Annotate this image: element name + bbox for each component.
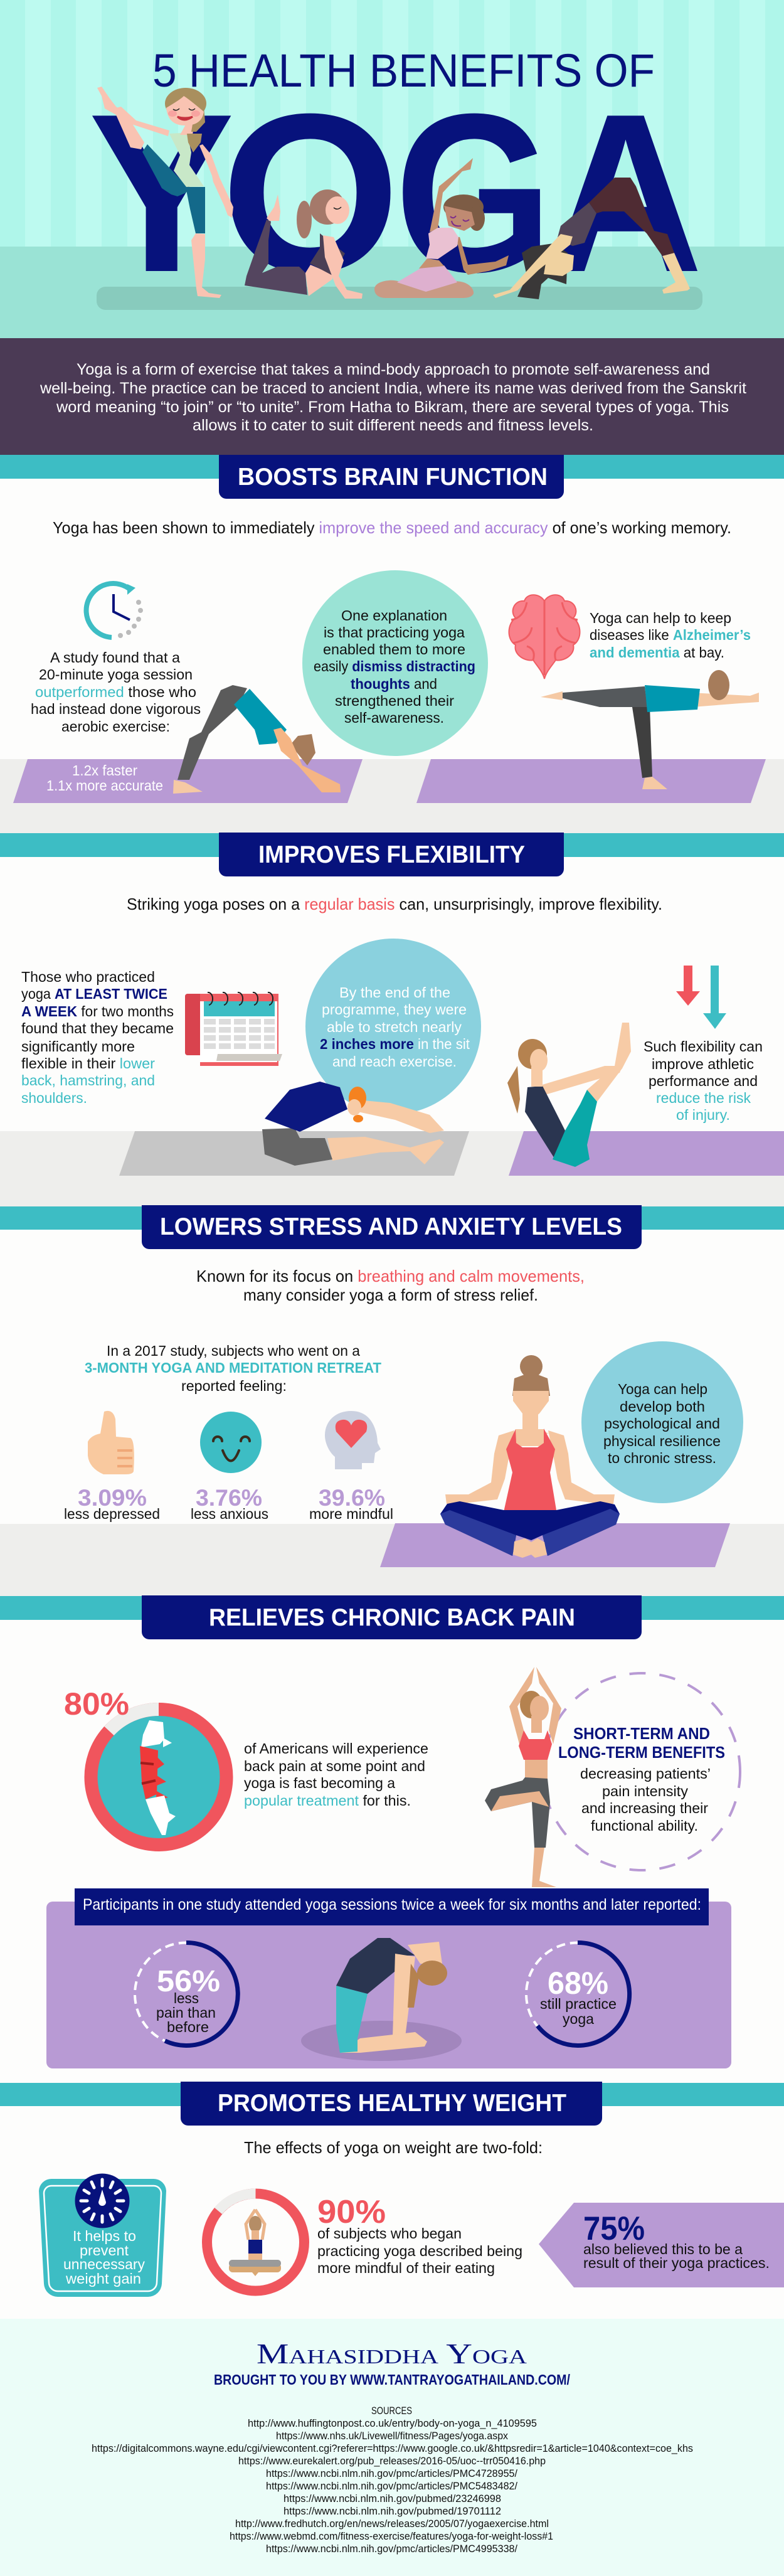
hero panel [0,0,784,339]
big word yoga: A [548,67,703,319]
sources: SOURCES [371,2405,412,2417]
circle callout: explanation: is that practicing yoga [324,624,465,641]
heading tab: PROMOTES HEALTHY WEIGHT [218,2090,566,2117]
study banner: Participants in one study attended yoga sessions twice a week for six months and later reported: [83,1896,701,1913]
circle callout: explanation: enabled them to more [323,641,465,657]
heading tab [219,833,564,876]
text: twice a week: flexible in their lower [21,1055,155,1072]
circle callout: resilience [581,1341,743,1503]
mat left [13,759,363,803]
text: back pain: popular treatment for this. [244,1792,411,1809]
text: short and long term: decreasing patients’ [580,1765,711,1782]
intro sentence: Yoga has been shown to immediately improve the speed and accuracy of one’s working memory. [53,518,731,537]
circle callout: resilience: develop both [620,1398,705,1415]
stat: depressed [64,1485,160,1522]
sources: https://www.webmd.com/fitness-exercise/features/yoga-for-weight-loss#1 [230,2530,553,2542]
circle callout: stretch [305,939,481,1114]
ring: 68 percent: 68% [548,1966,608,2001]
text: short and long term: SHORT-TERM AND [573,1724,710,1743]
text: athletic performance [644,1038,763,1123]
intro sentence [196,1267,585,1304]
circle callout: stretch: By the end of the [339,984,450,1001]
ring: 56 percent [135,1942,238,2045]
ring: 68 percent [526,1942,630,2045]
figure: small meditator [229,2210,281,2276]
stat: anxious: less anxious [191,1506,268,1522]
text: study: had instead done vigorous [31,701,201,717]
card: weight gain: unnecessary [63,2256,145,2272]
figure: bow pose [245,189,363,299]
circle callout: explanation [302,570,488,756]
circle callout: explanation: One explanation [341,607,447,624]
text: study [31,649,201,735]
circle callout: explanation: strengthened their [335,693,454,709]
section: improves flexibility [0,833,784,1206]
brand name: Mahasiddha Yoga [257,2338,527,2370]
circle callout: resilience: to chronic stress. [608,1450,716,1466]
figure: camel pose [301,1938,462,2061]
spine [140,1720,176,1835]
section: boosts brain function [0,455,784,833]
purple panel [46,1888,731,2068]
heading tab [181,2082,602,2126]
sources: http://www.fredhutch.org/en/news/releases/2005/07/yogaexercise.html [235,2518,549,2530]
callout arrow: 75 percent: also believed this to be a [583,2241,743,2257]
text: twice a week: Those who practiced [21,969,155,985]
circle callout: resilience: Yoga can help [618,1381,707,1397]
arrow: red down [676,966,700,1006]
figure: seated forward fold [262,1082,444,1166]
big word yoga [88,67,703,319]
arrow: teal down [703,966,726,1029]
stat: 90 percent [317,2194,522,2276]
intro panel [0,338,784,455]
card: weight gain: It helps to [73,2228,136,2244]
stat: mindful: 39.6% [319,1485,385,1511]
section: promotes healthy weight [0,2082,784,2297]
text: 2017 study: 3-MONTH YOGA AND MEDITATION RETREAT [85,1360,381,1376]
icon: calendar [185,993,282,1066]
text: diseases: and dementia at bay. [590,644,724,661]
circle callout: stretch: programme, they were [322,1001,467,1018]
text: athletic performance: improve athletic [652,1056,754,1072]
sources: https://www.ncbi.nlm.nih.gov/pubmed/19701112 [283,2505,501,2517]
figure: standing dancer pose [97,87,233,298]
circle callout: stretch: able to stretch nearly [327,1019,462,1035]
text: 2017 study: In a 2017 study, subjects who went on a [107,1343,360,1359]
circle callout: explanation: self-awareness. [344,710,444,726]
stat: mindful: more mindful [309,1506,393,1522]
ring: 68 percent: still practice [540,1996,617,2012]
intro panel: word meaning “to join” or “to unite”. From Hatha to Bikram, there are several types of yoga. This [56,398,729,416]
title: 5 HEALTH BENEFITS OF [152,45,655,97]
intro sentence: many consider yoga a form of stress relief. [243,1285,538,1304]
text: diseases [590,610,751,661]
section: relieves chronic back pain [0,1595,784,2068]
text: diseases: diseases like Alzheimer’s [590,627,751,643]
mat purple [509,1131,784,1176]
card: weight gain: prevent [80,2242,129,2259]
circle callout: explanation: thoughts and [351,676,437,692]
brought to you by: BROUGHT TO YOU BY WWW.TANTRAYOGATHAILAND.COM/ [214,2371,571,2388]
intro panel: Yoga is a form of exercise that takes a mind-body approach to promote self-awareness and [77,361,710,378]
dashed circle [543,1673,740,1870]
ring: 56 percent: less [174,1990,199,2006]
text: twice a week: found that they became [21,1020,174,1036]
stat: depressed: 3.09% [78,1485,147,1511]
text: 2017 study [85,1343,381,1394]
heading tab [142,1205,642,1249]
heading tab: LOWERS STRESS AND ANXIETY LEVELS [160,1213,622,1240]
text: back pain [244,1740,428,1809]
footer panel [0,2319,784,2576]
sources: https://www.eurekalert.org/pub_releases/2016-05/uoc--trr050416.php [238,2455,546,2467]
text: short and long term: LONG-TERM BENEFITS [558,1743,725,1762]
ring: 56 percent: before [167,2019,209,2035]
mat text: 1.1x more accurate [46,777,163,794]
circle callout: explanation: easily dismiss distracting [314,658,475,674]
text: short and long term: pain intensity [602,1783,689,1799]
heading tab: RELIEVES CHRONIC BACK PAIN [209,1604,575,1631]
text: athletic performance: performance and [649,1073,758,1089]
text: 2017 study: reported feeling: [181,1378,287,1394]
ring: 56 percent: 56% [157,1965,220,1998]
heading tab [142,1595,642,1639]
icon: smiley [200,1412,262,1473]
text: study: aerobic exercise: [61,718,170,735]
text: twice a week: yoga AT LEAST TWICE [21,986,167,1002]
callout arrow: 75 percent [539,2203,784,2287]
text: study: 20-minute yoga session [39,666,193,683]
text: athletic performance: of injury. [676,1107,730,1123]
text: athletic performance: Such flexibility can [644,1038,763,1055]
mat text: 1.2x faster [72,762,137,779]
stat: 90 percent: 90% [317,2194,386,2230]
stat: depressed: less depressed [64,1506,160,1522]
donut: 80 percent [91,1709,226,1844]
mat text [46,762,163,794]
text: twice a week: A WEEK for two months [21,1003,174,1019]
mat [380,1523,730,1567]
text: twice a week: shoulders. [21,1090,87,1106]
callout arrow: 75 percent: result of their yoga practices. [583,2255,770,2271]
text: short and long term: functional ability. [591,1818,698,1834]
text: athletic performance: reduce the risk [656,1090,751,1106]
mat right [416,759,766,803]
intro sentence: Striking yoga poses on a regular basis can, unsurprisingly, improve flexibility. [127,895,662,913]
stat: 80 percent: 80% [64,1686,129,1722]
sources: https://www.ncbi.nlm.nih.gov/pmc/articles/PMC5483482/ [266,2480,517,2492]
heading tab [219,455,564,499]
stat: 90 percent: more mindful of their eating [317,2260,495,2276]
circle callout: stretch: and reach exercise. [332,1053,457,1070]
sources: https://www.ncbi.nlm.nih.gov/pmc/articles/PMC4995338/ [266,2543,517,2555]
icon: scale dial [75,2173,129,2228]
study banner [75,1888,709,1925]
text: back pain: of Americans will experience [244,1740,428,1757]
text: study: A study found that a [50,649,180,666]
callout arrow: 75 percent: 75% [583,2210,645,2247]
sources [92,2405,693,2555]
intro panel: allows it to cater to suit different needs and fitness levels. [193,417,593,434]
figure: warrior three [541,670,759,789]
sources: http://www.huffingtonpost.co.uk/entry/body-on-yoga_n_4109595 [248,2417,537,2429]
intro sentence: The effects of yoga on weight are two-fold: [244,2138,543,2157]
sources: https://www.nhs.uk/Livewell/fitness/Pages/yoga.aspx [276,2430,508,2442]
card: weight gain: weight gain [65,2270,141,2287]
text: study: outperformed those who [35,684,196,700]
text: twice a week: significantly more [21,1038,135,1055]
stat: 90 percent: of subjects who began [317,2225,462,2242]
stat: anxious: 3.76% [196,1485,262,1511]
stat: mindful [309,1485,393,1522]
intro sentence: Known for its focus on breathing and calm movements, [196,1267,585,1285]
heading tab: IMPROVES FLEXIBILITY [258,841,525,868]
icon: thumbs up [88,1411,134,1474]
card: weight gain [39,2173,166,2297]
text: short and long term [558,1724,725,1834]
circle callout: resilience: psychological and [604,1415,720,1432]
icon: brain [509,595,580,679]
mat gray [119,1131,469,1176]
ring: 68 percent: yoga [563,2011,594,2027]
text: diseases: Yoga can help to keep [590,610,731,626]
icon: clock [87,583,143,638]
big word yoga: Y [88,67,235,319]
sources: https://digitalcommons.wayne.edu/cgi/viewcontent.cgi?referer=https://www.google.co.uk/&httpsredir=1&article=1040&context=coe_khs [92,2442,693,2454]
figure: meditating woman [440,1355,620,1558]
stat: anxious [191,1485,268,1522]
figure: downward dog [173,685,341,794]
intro panel: well-being. The practice can be traced to ancient India, where its name was derived from the Sanskrit [40,380,746,397]
text: back pain: back pain at some point and [244,1758,425,1774]
section: lowers stress and anxiety [0,1205,784,1596]
stat: 90 percent: practicing yoga described being [317,2243,522,2259]
text: short and long term: and increasing their [581,1800,708,1816]
text: twice a week: back, hamstring, and [21,1072,155,1088]
icon: head with heart [325,1411,381,1469]
big word yoga: G [395,67,553,319]
figure: boat pose [507,1023,631,1167]
circle callout: stretch: 2 inches more in the sit [320,1036,470,1052]
sources: https://www.ncbi.nlm.nih.gov/pmc/articles/PMC4728955/ [266,2467,517,2479]
figure: tree pose [485,1667,561,1887]
text: back pain: yoga is fast becoming a [244,1775,395,1791]
heading tab: BOOSTS BRAIN FUNCTION [238,464,548,491]
ring: 56 percent: pain than [156,2004,216,2021]
circle callout: resilience: physical resilience [603,1433,721,1449]
figure: downward dog [493,178,690,299]
figure: seated side bend [374,158,509,298]
big word yoga: O [221,67,400,319]
donut: 90 percent [207,2193,304,2291]
sources: https://www.ncbi.nlm.nih.gov/pubmed/23246998 [283,2493,501,2504]
text: twice a week [21,969,174,1106]
